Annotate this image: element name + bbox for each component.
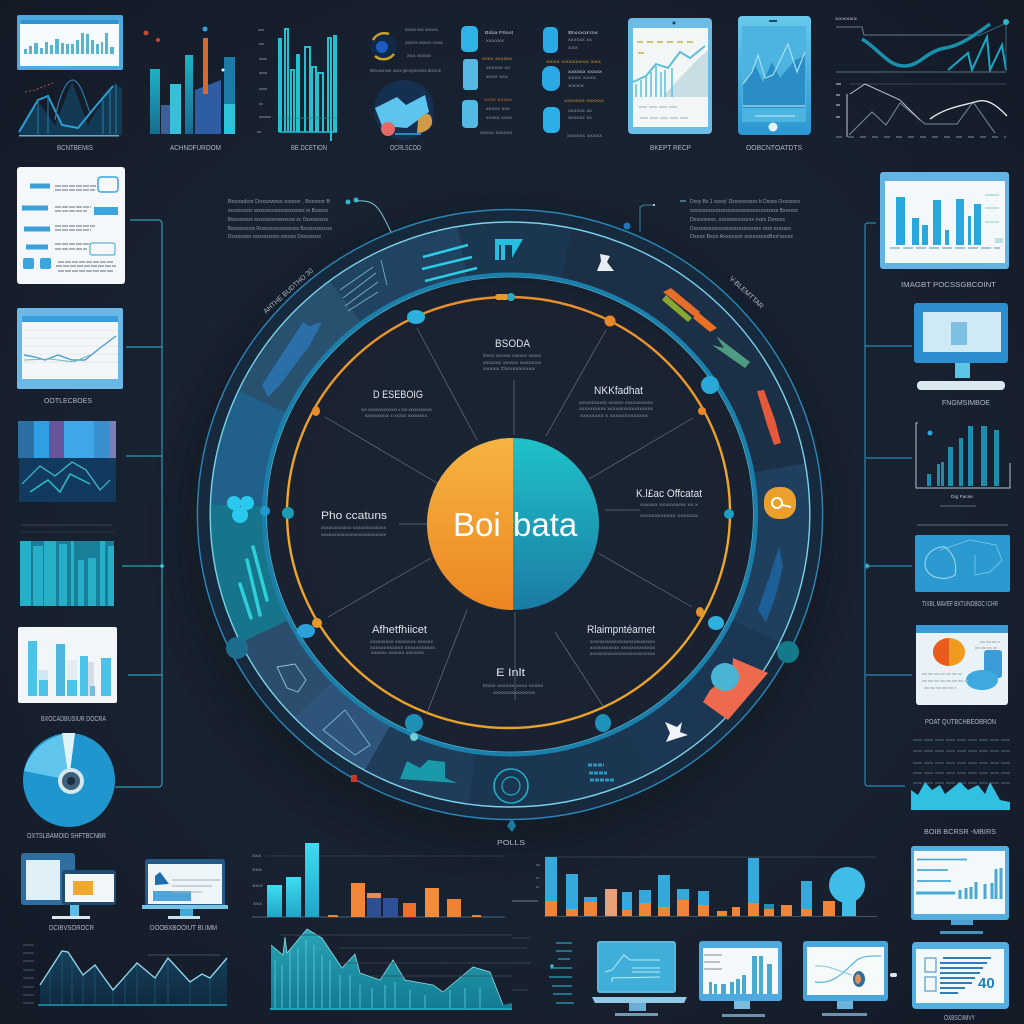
icon: teal mini chart (400, 760, 457, 783)
panel: paired monitors (21, 853, 116, 919)
text block: upper-left section: xxxxxxxxxx x xxxxx xxxxxxxx (365, 413, 428, 418)
text block: top section: xxxxxx xxxxx xxxxxxx (483, 360, 542, 365)
panel: right pie document (916, 625, 1008, 705)
captions: BKEPT RECP (650, 145, 691, 152)
callout: top-right text: Dxxxx Bxxx Axxxoxxx xxxxxxxxxBxx'xxxxx (690, 234, 794, 240)
panel: teal monitor (592, 941, 687, 1016)
callout: top-right text: Dxxxoxxxx, xxxxxxxoxxxxx xxxx Dxxxxx (690, 217, 786, 223)
callout: top-left text: xxxxxoxxxxx xxxxxxxxxxxxxoxxxxxxxxx xx Bxxxoxx (228, 208, 328, 214)
caption: BXOCADBUSIUR DOCRA (41, 716, 106, 723)
panel: right bottom monitor (911, 846, 1009, 934)
panel: app cards right column: xxxxxx xx (568, 115, 593, 120)
caption: bottom centre label (497, 818, 525, 847)
text block: bottom section: xxxxxxxxxxxxxx (493, 690, 536, 695)
curved label left: AHTHE BUDTHO 30 (263, 267, 315, 315)
caption: OCRLSCOO (390, 145, 421, 152)
icon: wire chart (323, 710, 370, 755)
bar chart: bottom left (252, 843, 505, 917)
icon: blue disc pie (23, 733, 115, 827)
text block: bottom section: E Inlt (496, 667, 525, 679)
icon: three cyan lines (422, 245, 477, 281)
panel: app cards right column: xxxxxx xxxxx (567, 133, 603, 138)
panel: globes: Bmoovnosr xxxx gnoxyoorxxs durooe (370, 68, 441, 73)
callout: top-left text: Bxxxoxxxxxx xxxxxoxxxxxxxxxxxxx xx: Dxxxoxxxxxx (228, 217, 328, 223)
panel: app cards right column: xxxxxx xx (568, 37, 593, 42)
caption: OXBSCIIMVY (944, 1015, 975, 1022)
panel: list monitor (912, 942, 1009, 1009)
text block: right section (636, 488, 702, 518)
panel: right data lines (911, 740, 1010, 810)
text block: lower-right section: xxxxxxxxxxxxxxxxxxxxxxxxxxx (590, 639, 656, 644)
panel: app cards left column: xxxx xxxxxx (482, 56, 513, 61)
icon: red bar (757, 390, 781, 445)
text block: left section: xxxxxxxxxxxxxxxxxxxxxxxxx (321, 532, 387, 537)
panel: left line chart (17, 308, 123, 389)
ring band (126, 140, 894, 889)
panel: app cards left column: xxxx xxx (486, 74, 509, 79)
callout: top-left text: Bxoosdxxr Doxsxwxsx oxooxr , Bxxxoxr B (228, 199, 331, 205)
caption: IMAGBT POCSSGBCOINT (901, 282, 997, 289)
bar chart: bottom right stacked (512, 857, 877, 916)
icon: cyan clover (227, 496, 254, 523)
text block: upper-left section: D ESEBOIG (373, 389, 423, 401)
text block: lower-left section: xxxxxxxxx xxxxxxxx xxxxxx (370, 639, 434, 644)
circular diagram: data ring (126, 140, 894, 889)
panel: right outlined bar chart (916, 423, 1010, 525)
text block: top section: BSODA (495, 338, 531, 350)
panel: map monitor (803, 941, 897, 1016)
panel: app cards left column: xxxxx xxx (486, 106, 511, 111)
curved label right: V-BLEMTTAR (728, 275, 765, 310)
area chart: bottom teal (270, 929, 512, 1010)
icon: blue mini labels (588, 765, 614, 780)
text block: right section: K.l£ac Offcatat (636, 488, 702, 500)
callout: top-left text: Bxxxoxxxxxxx Rxxxoxxxxxxxxxxoxxx Bxxxoxxxxxxxxx (228, 226, 332, 232)
text block: top section: xxxxx Dxxxxxxxxx (483, 366, 536, 371)
panel: left document (17, 167, 125, 284)
captions (650, 145, 802, 152)
connector: right bracket (865, 223, 912, 786)
text block: lower-left section: Afhetfhiicet (372, 624, 427, 636)
panel: app cards right column: xxx (568, 45, 579, 50)
caption: bottom centre label: POLLS (497, 840, 525, 847)
callout: top-right text (690, 199, 800, 240)
panel: app cards right column: xxxxxxx xxxxxx (564, 98, 605, 103)
icon: white stack (597, 254, 614, 271)
callout: top-right text: Dxxy Bx 1 xxxxy' Dxxxoxxxxxx b Dxoxs Oxxxoxxx (690, 199, 800, 205)
icon: teal bars (240, 547, 267, 618)
ring shadow (205, 236, 805, 824)
text block: lower-left section: xxxxxx xxxxxx xxxxxxx (371, 650, 425, 655)
caption: BCNTBEMIS (57, 145, 93, 152)
panel: right blue map (915, 535, 1010, 592)
text block: right section: xxxxxxxxxxxx xxxxxxx (640, 513, 699, 518)
text block: lower-left section: xxxxxxxxxxxx xxxxxxxxxxx (370, 645, 436, 650)
icon: red shape with blue circle (703, 658, 768, 720)
ring nodes (226, 293, 799, 741)
panel: globes (370, 27, 444, 140)
text block: upper-right section (579, 385, 654, 418)
callout: top-left text (228, 199, 332, 240)
text block: lower-left section (370, 624, 436, 655)
bar chart: bottom left: xxx (252, 867, 263, 872)
spokes (325, 328, 693, 713)
text block: bottom section: Dxxx xxxxxx xxxx xxxxx (483, 683, 544, 688)
arrow: top-right callout connector (624, 201, 686, 232)
bar chart: bottom left: xxx (252, 883, 264, 888)
icon: white logo (665, 722, 688, 742)
panel: top-left dark line chart (19, 80, 122, 136)
captions: OOBCNTOATDTS (746, 145, 802, 152)
caption: ACHNDFUROOM (170, 145, 221, 152)
bar chart: bottom left: xxx (253, 901, 263, 906)
panel: monitor dashboard (142, 859, 228, 919)
icon: small line list (340, 260, 387, 311)
text block: upper-right section: NKKfadhat (594, 385, 643, 397)
caption: OXTSLBAMOID SHFTBCNBR (27, 833, 106, 840)
panel: thin teal bar chart (257, 29, 337, 141)
centre sphere: Big Data (427, 438, 599, 610)
callout: top-right text: Dxxxoxxxxxxxxxxxxoxxxxxxxxxx xxxx xxxxxxx (690, 226, 791, 232)
icon: wire box (277, 664, 306, 692)
panel: right monitor (914, 303, 1008, 390)
text block: lower-right section: Rlaimpntéarnet (587, 624, 655, 636)
panel: app cards left column (461, 26, 514, 135)
panel: globes: xxxxx xxx xxxxxx (405, 27, 439, 32)
panel: app cards right column: xxxx (568, 83, 585, 88)
area chart: bottom left navy (23, 945, 227, 1005)
panel: top right line charts (835, 16, 1009, 137)
panel: right top chart (880, 172, 1009, 269)
text block: lower-right section (587, 624, 656, 656)
text block: left section: xxxxxxxxxxxx xxxxxxxxxxxxx (321, 525, 387, 530)
text block: lower-right section: xxxxxxxxxxxxxxxxxxxxxxxxxx (590, 651, 656, 656)
text block: lower-right section: xxxxxxxxxxx xxxxxxxxxxxxx (590, 645, 656, 650)
icon: blue texture chart (262, 322, 322, 397)
callout: top-left text: Dxxxoxxxxx xxxxxxxxxxxx xxxxxxx Dxxxoxxxxx (228, 234, 321, 240)
caption: DOOBXBOOIUT BI.IMM (150, 925, 217, 932)
caption: POAT QUTBCHBEOBRON (925, 719, 996, 726)
panel: right outlined bar chart: Dig Facse (951, 494, 974, 499)
marker: red (351, 775, 357, 782)
bar chart: bottom left: xxx (252, 853, 262, 858)
panel: list monitor: 40 (978, 975, 995, 992)
text block: bottom section (483, 667, 544, 695)
panel: app cards right column: xxxxxx xxxxx (568, 69, 603, 74)
panel: left teal bars (20, 525, 114, 606)
text block: left section (321, 510, 388, 537)
panel: tablet blue chart (738, 16, 811, 135)
panel: top right line charts: xxxxxx (835, 16, 858, 21)
panel: left white bar chart (18, 627, 117, 703)
panel: app cards left column: xxxxx xxxxxx (480, 130, 513, 135)
panel: app cards left column: Bdoa P0oot (485, 30, 514, 35)
legend: mini list (512, 938, 574, 1003)
centre sphere: Big Data: Boi (453, 506, 501, 543)
text block: upper-left section: xxx xxxxxxxxxxxxxxx x xxx xxxxxxxxxxxx (361, 407, 433, 412)
panel: app cards right column: Bxoorox (568, 30, 599, 35)
panel: app cards right column: xxxxxx xx (568, 108, 593, 113)
panel: left tiles and dark chart (18, 421, 116, 502)
panel: app cards left column: xxxx xxxxx (484, 97, 513, 102)
text block: upper-right section: xxxxxxxxxx xxxxxxxxxxxxxxxxx (579, 406, 654, 411)
icon: cyan M7 mark (495, 239, 523, 260)
panel: app cards left column: xxxxxx xx (486, 65, 511, 70)
text block: right section: xxxxxx xxxxxxxxx xx x (640, 502, 699, 507)
text block: upper-right section: xxxxxxxx x xxxxxxxxxxxxx (580, 413, 649, 418)
text block: top section: Dxxx xxxxxx xxxxxx xxxxx (483, 353, 542, 358)
icon: target circle (494, 769, 528, 803)
panel: bars monitor (699, 941, 782, 1017)
callout: top-right text: xxxxxoxxxxxxxxxxxxxxxxoxxxxxxxxxxxx Bxxxxxx (690, 208, 798, 214)
caption: BE.DCETION (291, 145, 327, 152)
panel: app cards left column: xxxxx xxxx (486, 115, 513, 120)
icon: orange and green bars (662, 288, 750, 368)
caption: DCIBVSOROCR (49, 925, 94, 932)
panel: top 3D bar chart (144, 26, 235, 134)
panel: tablet line chart (628, 18, 712, 134)
panel: app cards right column: xxxx xxxxxxxx xxx (546, 59, 602, 64)
caption: OOTLECBOES (44, 398, 92, 405)
icon: orange badge (764, 487, 796, 519)
text block: top section (483, 338, 542, 371)
connector: left bracket (115, 220, 164, 787)
caption: FNGMSIMBOE (942, 400, 990, 407)
panel: top-left monitor chart (17, 15, 123, 70)
panel: app cards left column: xxxxxx (486, 38, 505, 43)
text block: left section: Pho ccatuns (321, 510, 388, 522)
panel: app cards right column: xxxx xxxx (568, 75, 597, 80)
orange ring (287, 297, 730, 728)
icon: blue spike (758, 547, 783, 622)
arrow: top-left callout connector (346, 198, 391, 232)
panel: app cards right column (542, 27, 605, 138)
panel: globes: xxxxxx xxxxxx xxxxx (405, 40, 444, 45)
caption: BOIB BCRSR -MBIRS (924, 829, 996, 836)
centre sphere: Big Data: bata (513, 506, 578, 543)
text block: upper-right section: xxxxxxxxxxx xxxxxx xxxxxxxxxxx (579, 400, 654, 405)
text block: upper-left section (361, 389, 433, 418)
panel: globes: xxx xxxxx (407, 53, 432, 58)
